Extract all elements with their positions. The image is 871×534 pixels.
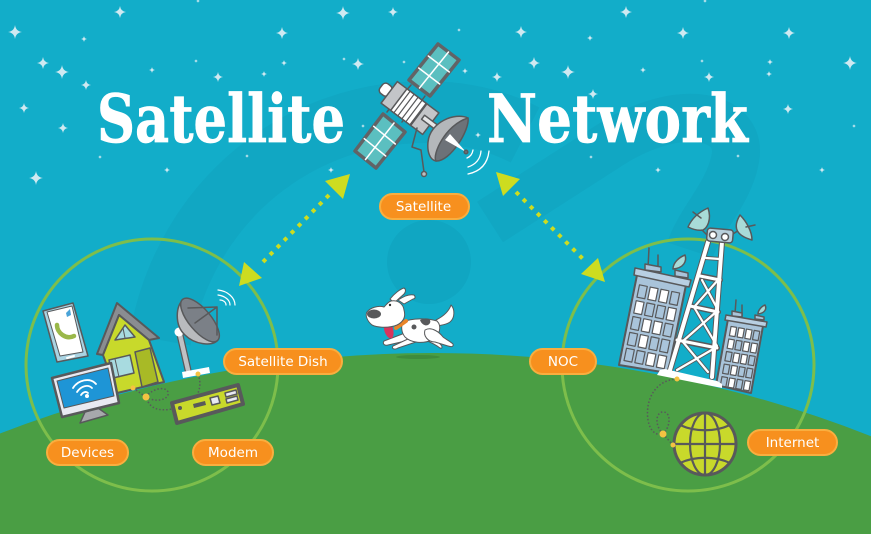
icon: phone xyxy=(43,303,88,362)
starfield xyxy=(8,0,857,185)
icon: dog xyxy=(366,288,454,359)
label: NOC xyxy=(530,349,596,374)
icon: left office building xyxy=(619,248,691,373)
NOC wiring xyxy=(647,376,680,448)
label: Internet: Internet xyxy=(766,435,819,451)
label: Devices xyxy=(47,440,128,465)
label: Satellite Dish xyxy=(224,349,342,374)
icon: communications tower xyxy=(657,208,755,388)
icon: globe xyxy=(674,413,736,475)
label: Satellite Dish: Satellite Dish xyxy=(238,354,328,370)
icon: monitor with wifi xyxy=(52,363,119,423)
left network circle xyxy=(26,239,278,491)
label: Satellite: Satellite xyxy=(396,199,451,215)
label: Internet xyxy=(748,430,837,455)
label: Modem: Modem xyxy=(208,445,258,461)
right network circle xyxy=(562,239,814,491)
title: Network: Network xyxy=(487,80,749,158)
icon: satellite dish xyxy=(174,290,235,378)
arrow: dish to satellite xyxy=(239,174,350,286)
device wiring xyxy=(130,372,200,410)
label: NOC: NOC xyxy=(548,354,578,370)
icon: right office building xyxy=(716,300,767,393)
icon: house xyxy=(97,303,164,393)
title: Satellite: Satellite xyxy=(97,80,345,158)
label: Modem xyxy=(193,440,273,465)
icon: satellite xyxy=(355,44,489,176)
green hill xyxy=(0,353,871,534)
icon: modem xyxy=(172,385,243,423)
label: Satellite xyxy=(380,194,469,219)
label: Devices: Devices xyxy=(61,445,114,461)
arrow: satellite to NOC xyxy=(496,172,605,282)
